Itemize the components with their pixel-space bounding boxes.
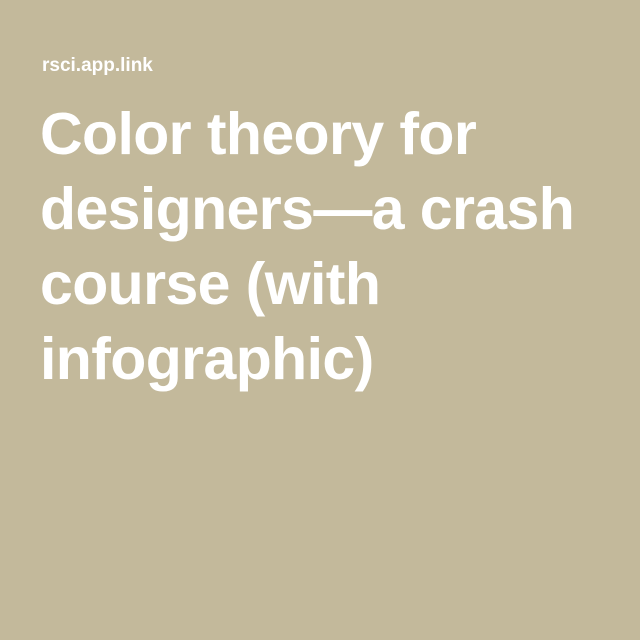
title: infographic) (40, 326, 374, 392)
title: designers—a crash (40, 176, 574, 242)
source link: rsci.app.link (42, 55, 153, 76)
title: course (with (40, 251, 380, 317)
title (40, 101, 574, 392)
title: Color theory for (40, 101, 476, 167)
